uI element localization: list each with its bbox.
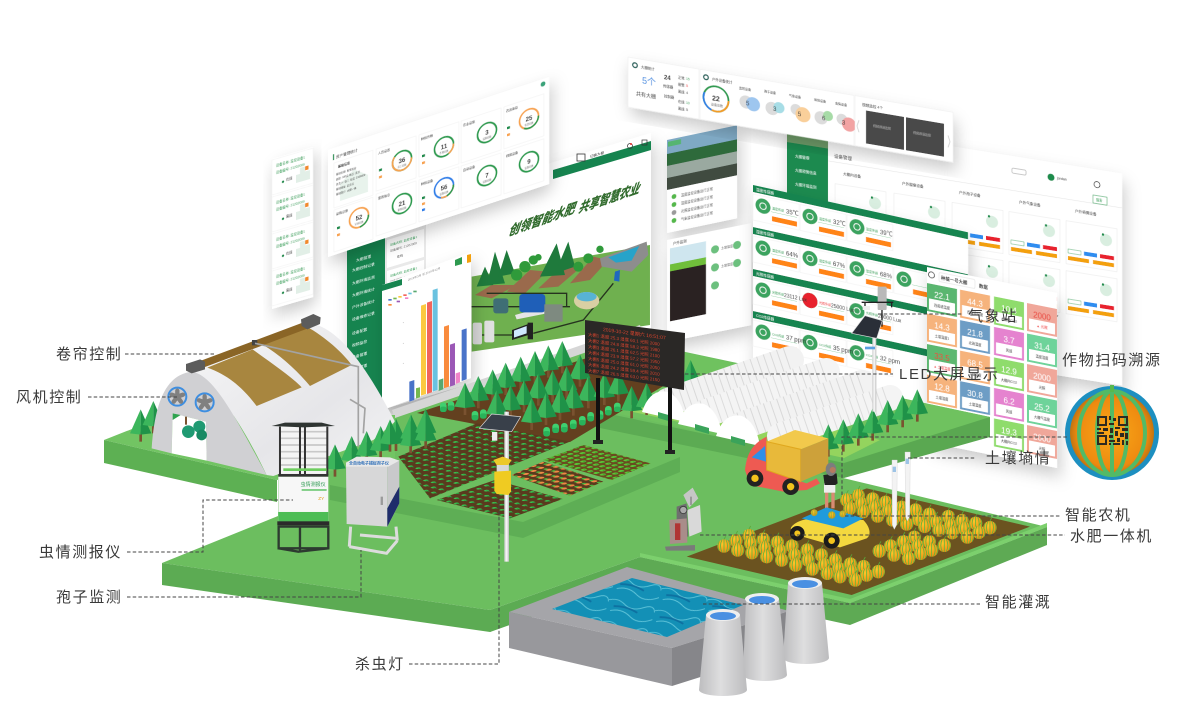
card: basic information <box>334 150 373 208</box>
tile column 3: 12.9 <box>1001 365 1017 377</box>
device card list: 设备编号: 21202009 <box>276 273 305 286</box>
tile column 1: 33.5 <box>934 352 950 364</box>
device card list <box>272 148 313 306</box>
tile column 2: 西南墙湿度 <box>967 309 984 317</box>
card: facility ring: 3 <box>485 129 489 137</box>
card: purchases ring: 采购记录 <box>336 208 348 216</box>
label: 孢子监测: 孢子监测 <box>56 589 122 606</box>
label: LED大屏显示: LED大屏显示 <box>899 366 999 383</box>
ground: polytunnel terrace <box>600 345 990 478</box>
card: auto device ring: 自动设备 <box>463 164 475 172</box>
card: stock ring <box>504 94 544 149</box>
card: crop ring: 11 <box>441 143 448 152</box>
panel title <box>507 177 643 240</box>
temperature row: 39℃ <box>880 229 893 239</box>
panel: asset statistics <box>328 77 549 257</box>
crop QR traceability melon <box>1065 385 1159 480</box>
delivery truck <box>745 430 828 495</box>
middle device cards: 设备名称: 监控设备1 <box>390 265 417 278</box>
label: 杀虫灯: 杀虫灯 <box>355 656 405 673</box>
humidity row: 湿度传感器 <box>756 229 774 238</box>
device card list: 设备名称: 监控设备1 <box>276 191 305 205</box>
spore monitoring device: 全自动电子捕捉孢子仪 <box>349 460 389 466</box>
temperature row: 32℃ <box>833 219 846 228</box>
leader line: insect lamp <box>409 500 499 664</box>
tile column 1 <box>927 283 957 408</box>
tile column 2: 土壤湿度 <box>969 370 982 378</box>
co2 row: 32 ppm <box>880 356 900 366</box>
sub-panel: outdoor device statistics: 孢子设备 <box>764 88 776 95</box>
tile column 3: 3.7 <box>1003 335 1015 346</box>
shade curtains <box>207 327 352 406</box>
label: 智能农机: 智能农机 <box>1065 506 1131 524</box>
card: basic information: 基地地址: 北京市 <box>336 181 355 191</box>
field: upper bushes plot <box>417 357 665 442</box>
card: personnel ring: 人员设置 <box>378 147 390 155</box>
card: equipment ring: 种植设备 <box>421 177 433 186</box>
tile column 4: ▲ 光照 <box>1036 323 1048 330</box>
tile column 4: 大棚气温度 <box>1034 414 1051 422</box>
forecaster cabinet <box>277 477 329 525</box>
greenhouse front face <box>152 372 267 475</box>
label: 水肥一体机: 水肥一体机 <box>1070 528 1153 545</box>
forecaster cabinet: 虫情测报仪 <box>301 481 326 488</box>
QR code <box>1097 416 1128 445</box>
trees beside greenhouse <box>324 409 436 477</box>
card: video device ring: 设备总数 <box>525 163 534 170</box>
light row: 光照传感 <box>819 300 831 307</box>
insect forecasting device <box>272 423 335 552</box>
tile column 4: 光照 <box>1039 384 1046 391</box>
fans <box>168 388 214 411</box>
bars <box>388 288 467 402</box>
sidebar menu: 视频监控 <box>352 339 367 348</box>
tile column 1: ▲ 土壤温度 <box>934 363 951 372</box>
sub-panel: outdoor device statistics <box>700 69 856 146</box>
label: 土壤墒情: 土壤墒情 <box>985 449 1051 467</box>
card: video device ring: 9 <box>527 158 531 166</box>
sub-panel: greenhouse statistics: 控制器 <box>664 93 675 100</box>
forecaster stand <box>279 527 328 552</box>
card: auto device ring <box>461 153 501 208</box>
label: 智能灌溉: 智能灌溉 <box>985 593 1051 611</box>
sidebar menu: 大棚控制记录 <box>352 261 375 273</box>
sidebar menu: 用户管理 <box>352 363 367 372</box>
sub-panel: greenhouse statistics: 共有大棚 <box>636 90 656 101</box>
tile column 2: 68.5 <box>967 358 983 370</box>
light row: 20000 Lux <box>878 314 902 325</box>
card: video device ring: 视频设备 <box>506 149 518 158</box>
card: crop ring: 作物总数 <box>440 148 449 155</box>
sub-panel: greenhouse statistics: 24 <box>664 75 671 82</box>
tile column 2: 30.8 <box>967 389 983 401</box>
tile column 1: 22.1 <box>934 291 950 303</box>
sub-panel: video monitoring: 视频通话监控 <box>913 129 931 137</box>
control rod <box>255 343 365 447</box>
LED display board: 大棚7 温度 26.5 湿度 63.0 光照 2150 <box>588 367 660 384</box>
tile column 2: 北雨温度 <box>969 340 982 348</box>
humidity row: 64% <box>786 251 799 260</box>
humidity row: 湿度传感 <box>772 247 784 255</box>
LED display board: 大棚6 温度 24.2 湿度 59.4 光照 2010 <box>588 361 660 378</box>
forecaster cage <box>272 423 335 477</box>
label: 风机控制: 风机控制 <box>16 389 82 406</box>
tile column 4: 31.4 <box>1034 341 1050 353</box>
header bar: 切换大棚 <box>590 150 604 159</box>
water tanks <box>699 577 829 696</box>
light row: 25000 Lux <box>831 303 855 314</box>
device card list: 设备编号: 21202009 <box>276 162 305 175</box>
tile column 3: 10.4 <box>1001 304 1017 316</box>
temperature row: 温度传感 <box>866 226 878 233</box>
panel: greenhouse photo and list: 温度监控设备运行正常 <box>681 186 713 198</box>
melon field <box>687 486 1030 595</box>
tile column 3: 风速 <box>1006 408 1013 415</box>
tile column 4 <box>1027 303 1057 459</box>
card: personnel ring: 员工总数 <box>398 162 407 169</box>
chart header: 2019年3月 至 2019年12月 <box>408 265 441 282</box>
card: equipment ring: 56 <box>441 184 448 193</box>
device card list: 在线 <box>286 249 293 256</box>
card: stock ring: 25 <box>526 115 533 124</box>
co2 row: CO2传感 <box>866 352 878 360</box>
co2 row: 35 ppm <box>833 346 853 356</box>
panel: device management dashboard: 户外墒情设备 <box>1075 208 1097 217</box>
panel: device management dashboard: 大棚内设备 <box>843 171 861 179</box>
panel: top statistics strip <box>628 57 953 162</box>
smart farm robot <box>790 507 870 549</box>
sub-panel: outdoor device statistics: 气象设备 <box>789 92 801 99</box>
tile column 3: 19.3 <box>1001 426 1017 438</box>
door with plants <box>172 413 207 461</box>
device card list: 离线 <box>286 212 293 219</box>
co2 row: CO2传感 <box>772 331 784 339</box>
middle device cards: 设备编号: 21202009 <box>390 240 417 253</box>
tile column 1: 土壤湿度1 <box>935 333 949 341</box>
soil moisture sensors <box>892 452 910 529</box>
tile column 2 <box>960 290 990 415</box>
card: basic information: 负责人: 张三 电话: 1300000 <box>336 173 366 186</box>
panel: small device list cards <box>272 147 313 309</box>
device card list: 设备名称: 监控设备1 <box>276 228 305 242</box>
leader line: traceability <box>842 437 1067 495</box>
middle device cards: 设备编号: 21202009 <box>390 271 417 284</box>
panel: greenhouse photo and list: 湿度监控设备运行正常 <box>681 194 713 206</box>
panel: smart fertigation main screen <box>347 133 651 420</box>
light row: 光照传感器 <box>756 271 774 280</box>
tile column 3: 大棚内CO2 <box>1001 377 1017 385</box>
card: equipment ring: 设备总数 <box>440 189 449 196</box>
panel: device management dashboard: 大棚预警信息 <box>795 167 817 176</box>
device card list: 设备编号: 21202009 <box>276 199 305 212</box>
co2 row <box>753 311 968 393</box>
forecaster cabinet: ZY <box>318 496 324 501</box>
card: facility ring: 设施总数 <box>483 134 492 141</box>
roller motors <box>186 314 321 373</box>
tile panel header: 种植一号大棚 <box>941 274 968 287</box>
temperature row <box>753 185 968 267</box>
tile column 3: 风速 <box>1006 347 1013 354</box>
panel: device management dashboard: 设备管理 <box>834 153 852 162</box>
leader line: farm machine <box>845 515 1060 517</box>
leader line: curtain control <box>125 353 216 355</box>
temperature row: 温度传感 <box>819 216 831 223</box>
humidity row <box>753 227 968 309</box>
card: purchases ring: 52 <box>356 214 363 223</box>
leader line: weather station <box>878 313 962 315</box>
card: equipment ring <box>419 167 459 222</box>
pool water <box>552 578 743 637</box>
sidebar menu: 户外设备统计 <box>352 298 375 310</box>
sub-panel: outdoor device statistics: 5 <box>798 112 802 119</box>
panel: outdoor soil monitoring: 土壤温度 <box>721 243 733 250</box>
sidebar menu: 设备管理 <box>352 351 367 360</box>
LED display board: 大棚1 温度 25.3 湿度 60.1 光照 2000 <box>588 331 660 348</box>
sidebar menu: 设备维修记录 <box>352 310 375 322</box>
sub-panel: outdoor device statistics: 5 <box>746 101 750 108</box>
integrated fertigation machine <box>665 488 702 551</box>
tile column 4: 温度湿度 <box>1036 353 1049 361</box>
leader line: fan control <box>88 396 178 398</box>
tile column 1: 12.8 <box>934 382 950 394</box>
sub-panel: greenhouse statistics <box>628 57 699 119</box>
panel: device management dashboard: 大棚管理 <box>795 153 810 161</box>
sub-panel: greenhouse statistics: 传感器 <box>663 83 674 90</box>
panel: greenhouse photo and list: 气象监控设备运行正常 <box>681 210 713 222</box>
sidebar menu: 设备配置 <box>352 327 367 336</box>
label: 卷帘控制: 卷帘控制 <box>56 346 122 363</box>
pool <box>509 567 789 686</box>
panel: device management dashboard: 户外摄像设备 <box>902 180 924 189</box>
sub-panel: video monitoring: 视频监控 4个 <box>862 102 883 110</box>
tile column 3: 大棚内CO2 <box>1001 438 1017 446</box>
middle device cards <box>387 229 424 299</box>
panel: climate monitoring data <box>753 185 968 422</box>
light row: 光照传感 <box>772 289 784 297</box>
card: personnel ring: 36 <box>399 156 406 166</box>
tile column 2: 44.3 <box>967 297 983 309</box>
ground: central field terrace step <box>330 457 680 538</box>
device card list: 在线 <box>286 175 293 182</box>
humidity row: 68% <box>880 272 893 281</box>
temperature row: 温度传感器 <box>756 187 774 196</box>
panel: greenhouse photo and list: 光照监控设备运行正常 <box>681 202 713 214</box>
card: auto device ring: 7 <box>485 172 489 180</box>
chart header <box>382 254 471 291</box>
scene: fertigation system illustration <box>472 242 650 352</box>
tile column 3: 6.2 <box>1003 396 1015 407</box>
card: purchases ring: 记录总数 <box>355 219 364 226</box>
middle device cards: 在线 <box>397 252 403 259</box>
greenhouse film roof <box>190 324 395 476</box>
sidebar menu <box>347 229 385 420</box>
spore monitoring device <box>346 457 399 553</box>
panel: device management dashboard: 户外孢子设备 <box>959 190 981 198</box>
card: video device ring <box>504 139 544 194</box>
LED display board: 大棚4 温度 23.9 湿度 57.2 光照 1950 <box>588 349 660 366</box>
LED display board: 大棚3 温度 26.1 湿度 62.5 光照 2100 <box>588 343 660 360</box>
sub-panel: outdoor device statistics: 6 <box>822 116 826 123</box>
sub-panel: outdoor device statistics: 虫情设备 <box>835 100 847 107</box>
ground: greenhouse platform <box>104 415 395 502</box>
label: 气象站: 气象站 <box>968 308 1018 325</box>
panel title: 创领智能水肥 <box>507 196 579 240</box>
ground: main platform <box>162 325 1047 632</box>
leader line: spore monitor <box>127 550 361 597</box>
device card list: 设备编号: 21202009 <box>276 236 305 249</box>
insect killing lamp <box>479 412 521 562</box>
curtain roller <box>200 325 307 365</box>
card: irrigation ring: 灌溉信息 <box>378 192 390 200</box>
tile column 4: 2000 <box>1033 432 1051 445</box>
trees: terrace row <box>818 389 928 457</box>
farmer figure <box>823 463 838 508</box>
card: purchases ring <box>334 197 373 252</box>
tile panel header <box>928 270 1058 321</box>
LED display board <box>585 320 685 454</box>
sub-panel: greenhouse statistics: 大棚统计 <box>641 64 655 72</box>
card: basic information: 基地名称: 智慧农业 <box>336 166 357 176</box>
sidebar menu: 大棚环境监测 <box>352 274 375 286</box>
sidebar menu: 大棚环境统计 <box>352 286 375 298</box>
sub-panel: greenhouse statistics: 5个 <box>642 75 656 88</box>
panel: device management dashboard: 大棚环境监测 <box>795 181 817 190</box>
leader line: soil moisture <box>908 457 975 459</box>
tile column 4: 25.2 <box>1034 402 1050 414</box>
card: stock ring: 农资库存 <box>506 104 518 113</box>
sub-panel: outdoor device statistics: 3 <box>773 107 777 113</box>
card: auto device ring: 设备总数 <box>483 177 492 184</box>
tile column 1: 土壤湿度 <box>936 394 949 402</box>
panel: device management dashboard: 户外气象设备 <box>1019 199 1041 208</box>
sub-panel: outdoor device statistics: 户外设备统计 <box>712 76 733 85</box>
panel: bar chart <box>382 252 471 410</box>
humidity row: 湿度传感 <box>866 268 878 275</box>
trees: central orchard <box>454 341 701 430</box>
weather station <box>852 287 893 412</box>
co2 row: 37 ppm <box>786 335 806 346</box>
panel: greenhouse photo and list <box>667 125 737 233</box>
leader line: pest monitor <box>127 500 293 552</box>
sub-panel: outdoor device statistics: 22 <box>712 95 720 104</box>
scene equipment <box>472 270 620 344</box>
card: basic information: 基础信息 <box>338 160 350 169</box>
card: personnel ring <box>376 136 416 191</box>
panel: device management dashboard <box>787 120 1122 386</box>
tile column 3: 大棚内CO2 <box>1001 316 1017 324</box>
leader line: fertigation machine <box>700 534 1065 536</box>
sub-panel: video monitoring <box>855 96 953 162</box>
humidity row: 湿度传感 <box>819 258 831 265</box>
light row <box>753 269 968 351</box>
tile column 1: 14.3 <box>934 321 950 333</box>
panel: outdoor soil monitoring <box>667 223 751 342</box>
LED display board: 大棚2 温度 24.8 湿度 58.3 光照 1980 <box>588 337 660 354</box>
sub-panel: greenhouse statistics: 在线: 10 <box>678 99 690 106</box>
tile column 2: 土壤温度 <box>969 401 982 409</box>
panel: asset statistics: 资产管理统计 <box>336 147 358 159</box>
temperature row: 35℃ <box>786 208 799 218</box>
co2 row: CO2传感 <box>819 342 831 349</box>
sub-panel: greenhouse statistics: 报警: 5 <box>678 82 688 88</box>
device card list: 离线 <box>286 286 293 293</box>
sub-panel: outdoor device statistics: 3 <box>842 120 846 127</box>
header bar <box>553 140 651 179</box>
co2 row: CO2传感器 <box>756 313 774 322</box>
tile column 3 <box>994 296 1024 452</box>
tile column 4: 2000 <box>1033 310 1051 323</box>
panel: device management dashboard: 大棚环境统计 <box>795 195 817 204</box>
sub-panel: outdoor device statistics: 监控设备 <box>739 85 751 92</box>
card: basic information: 基地简介: 水肥一体 <box>336 186 357 196</box>
scene trees <box>477 242 604 287</box>
light row: 23112 Lux <box>784 293 807 304</box>
LED display board: 2019-10-22 星期六 16:51:07 <box>603 326 666 342</box>
scene pool <box>600 242 648 272</box>
panel: outdoor soil monitoring: 土壤湿度 <box>721 261 733 268</box>
tile column 4: 2000 <box>1033 371 1051 384</box>
sub-panel: greenhouse statistics: 正常: 15 <box>678 75 690 82</box>
card: irrigation ring: 灌溉总数 <box>398 205 407 212</box>
card: facility ring <box>461 108 501 163</box>
sub-panel: outdoor device statistics: 墒情设备 <box>814 97 826 104</box>
sidebar menu: 系统管理 <box>352 375 367 384</box>
panel: outdoor soil monitoring: 户外监测 <box>673 238 687 246</box>
card: irrigation ring: 21 <box>399 199 406 209</box>
card: stock ring: 农资总数 <box>525 120 534 127</box>
tile panel header: 数据 <box>979 282 988 291</box>
device card list: 设备名称: 监控设备1 <box>276 154 305 168</box>
card: irrigation ring <box>376 181 416 236</box>
polytunnel greenhouses <box>642 360 890 446</box>
middle device cards: 设备名称: 监控设备1 <box>390 234 417 247</box>
panel: coloured sensor tiles <box>927 267 1058 468</box>
light row: 光照传感 <box>866 310 878 317</box>
tile column 2: 21.8 <box>967 328 983 340</box>
card: basic information: 面积: 100亩 地点: 北京 <box>336 169 361 181</box>
tile column 4: 光照 <box>1039 445 1046 452</box>
tile column 1: 西南墙温度 <box>934 302 951 311</box>
device card list: 设备名称: 监控设备1 <box>276 265 305 279</box>
label: 作物扫码溯源: 作物扫码溯源 <box>1062 352 1162 369</box>
crop field plots <box>379 416 651 518</box>
LED display board: 大棚5 温度 25.0 湿度 61.0 光照 2050 <box>588 355 660 372</box>
sidebar menu: 大棚管理 <box>356 254 371 263</box>
temperature row: 温度传感 <box>772 205 784 213</box>
sub-panel: video monitoring: 视频通话监控 <box>873 123 891 131</box>
card: crop ring <box>419 122 459 177</box>
leader line: LED screen <box>685 373 893 375</box>
leader line: irrigation <box>703 603 980 605</box>
label: 虫情测报仪: 虫情测报仪 <box>39 544 122 561</box>
card: crop ring: 种植作物 <box>421 132 433 141</box>
sub-panel: outdoor device statistics: 设备总数 <box>711 101 723 108</box>
panel: device management dashboard: jordan <box>1056 176 1067 182</box>
sub-panel: greenhouse statistics: 离线: 5 <box>678 106 688 112</box>
panel: device management dashboard: 搜索 <box>1096 197 1103 203</box>
panel title: 共享智慧农业 <box>577 177 643 217</box>
humidity row: 67% <box>833 262 846 270</box>
sub-panel: greenhouse statistics: 离线: 4 <box>678 89 688 95</box>
card: facility ring: 农业设施 <box>463 119 475 127</box>
greenhouse with shade curtains and fans <box>130 314 436 477</box>
